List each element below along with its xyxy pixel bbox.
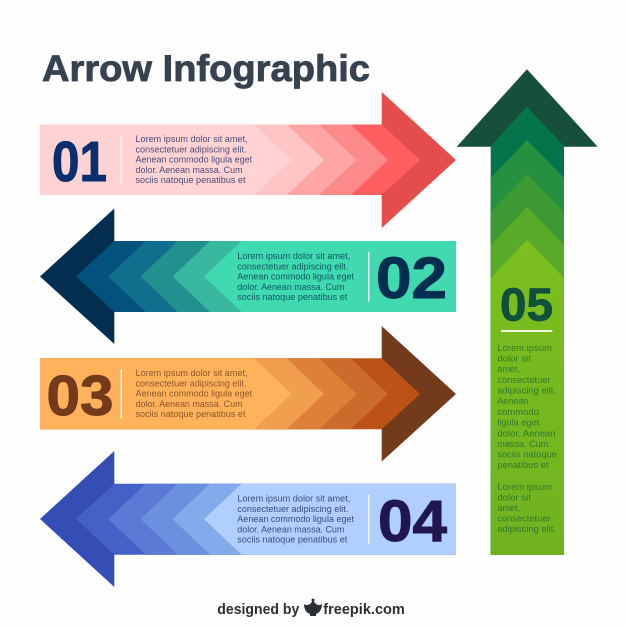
- panel: arrow 05: [457, 69, 598, 555]
- text block 05: dolor sit: [497, 354, 531, 364]
- text block 04: [237, 494, 354, 546]
- arrow 01 body and chevrons: [40, 92, 456, 228]
- text block 05: Lorem ipsum: [497, 482, 552, 493]
- arrow 05 body and chevrons: [457, 69, 598, 555]
- text block 04: Aenean commodo ligula eget: [237, 514, 354, 525]
- arrow 03 body and chevrons: [40, 326, 456, 462]
- text block 05: Aenean: [497, 396, 528, 407]
- text block 05: sociis natoque: [497, 450, 557, 460]
- panel: arrow 03: [40, 326, 456, 462]
- text block 01: sociis natoque penatibus et: [136, 175, 246, 186]
- text block 01: [136, 134, 253, 186]
- number 04: 04: [378, 489, 447, 554]
- panel: arrow 04: [40, 451, 456, 587]
- text block 05: consectetuer: [497, 514, 551, 524]
- text block 01: consectetuer adipiscing elit.: [136, 144, 246, 155]
- text block 02: sociis natoque penatibus et: [237, 292, 348, 303]
- number 01: 01: [52, 130, 107, 194]
- footer: freepik credit: designed by: [217, 601, 300, 618]
- text block 04: dolor. Aenean massa. Cum: [237, 524, 344, 535]
- panel: arrow 01: [40, 92, 456, 228]
- text block 05: amet,: [497, 503, 520, 514]
- text block 04: Lorem ipsum dolor sit amet,: [237, 494, 350, 504]
- text block 05: Lorem ipsum: [497, 343, 552, 354]
- text block 05: massa. Cum: [497, 439, 548, 450]
- panel: arrow 02: [40, 208, 456, 344]
- text block 04: consectetuer adipiscing elit.: [237, 504, 348, 515]
- footer: freepik credit: freepik.com: [323, 601, 405, 618]
- text block 02: consectetuer adipiscing elit.: [237, 261, 348, 272]
- text block 05: commodo: [497, 407, 539, 418]
- title: Arrow Infographic: [42, 47, 370, 89]
- text block 05: consectetuer: [497, 375, 551, 386]
- text block 05: ligula eget: [497, 418, 540, 428]
- footer: freepik credit: [217, 598, 405, 618]
- arrow 04 body and chevrons: [40, 451, 456, 587]
- text block 05: dolor. Aenean: [497, 428, 556, 440]
- text block 05: adipiscing elit.: [497, 524, 556, 535]
- number 03: 03: [46, 364, 114, 428]
- text block 02: [237, 251, 354, 303]
- text block 03: Lorem ipsum dolor sit amet,: [136, 368, 248, 379]
- text block 05: amet,: [497, 364, 520, 375]
- text block 05: [497, 343, 557, 535]
- text block 01: Aenean commodo ligula eget: [136, 154, 253, 166]
- icon: freepik crown bowl: [304, 598, 322, 616]
- text block 03: sociis natoque penatibus et: [136, 409, 246, 420]
- text block 01: dolor. Aenean massa. Cum: [136, 165, 242, 176]
- text block 02: Lorem ipsum dolor sit amet,: [237, 251, 350, 262]
- text block 05: adipiscing elit.: [497, 386, 556, 396]
- text block 03: consectetuer adipiscing elit.: [136, 378, 246, 389]
- text block 05: dolor sit: [497, 492, 531, 504]
- number 02: 02: [376, 246, 447, 311]
- text block 02: dolor. Aenean massa. Cum: [237, 282, 344, 293]
- text block 03: Aenean commodo ligula eget: [136, 388, 253, 400]
- text block 03: [136, 368, 253, 420]
- text block 02: Aenean commodo ligula eget: [237, 272, 354, 282]
- number 05: 05: [500, 278, 553, 330]
- arrow 02 body and chevrons: [40, 208, 456, 344]
- text block 05: penatibus et: [497, 460, 549, 471]
- text block 04: sociis natoque penatibus et: [237, 534, 348, 546]
- text block 01: Lorem ipsum dolor sit amet,: [136, 134, 248, 145]
- text block 03: dolor. Aenean massa. Cum: [136, 399, 242, 410]
